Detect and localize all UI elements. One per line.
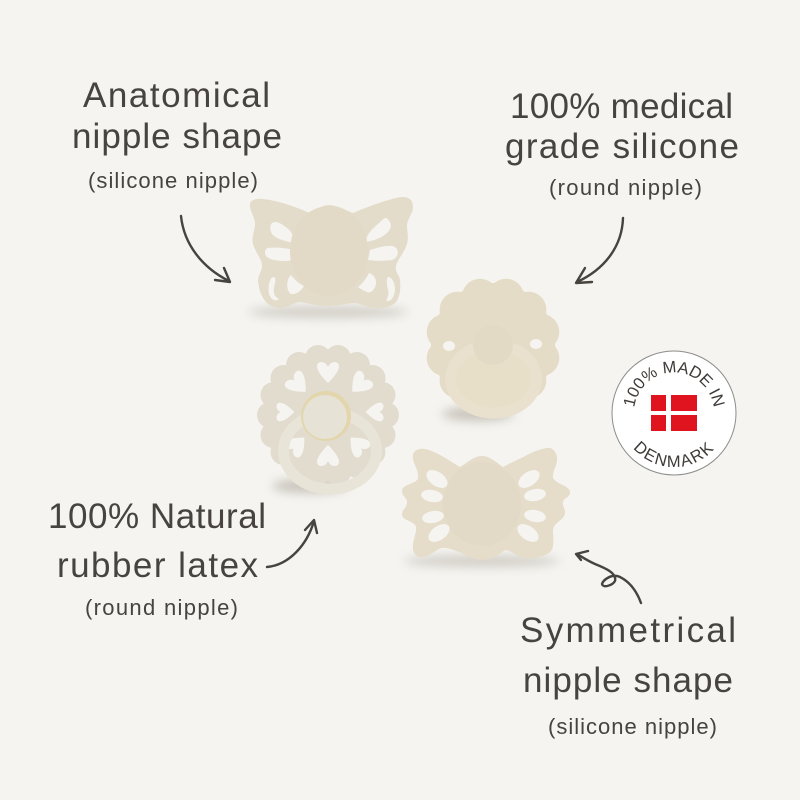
callout: medical grade silicone: grade silicone	[505, 127, 739, 166]
icon: Danish flag	[651, 395, 697, 431]
callout: anatomical nipple shape: (silicone nipple)	[88, 168, 258, 193]
callout: medical grade silicone	[505, 87, 739, 200]
badge text: top arc: 100% MADE IN	[624, 360, 725, 406]
callout: symmetrical nipple shape: nipple shape	[523, 661, 733, 700]
badge text: bottom arc: DENMARK	[634, 440, 714, 467]
badge: 100% made in Denmark	[612, 350, 736, 476]
callout: natural rubber latex: (round nipple)	[85, 595, 238, 620]
callout: anatomical nipple shape	[72, 76, 282, 193]
arrow: to symmetrical pacifier	[576, 551, 641, 603]
callout: symmetrical nipple shape: Symmetrical	[520, 611, 736, 650]
pacifier: daisy round nipple	[427, 279, 559, 421]
callout: anatomical nipple shape: nipple shape	[72, 117, 282, 156]
callout: natural rubber latex: 100% Natural	[48, 497, 266, 536]
callout: anatomical nipple shape: Anatomical	[83, 76, 270, 115]
pacifier: heart cutout round nipple	[257, 345, 399, 493]
callout: medical grade silicone: 100% medical	[510, 87, 733, 126]
arrow: to daisy pacifier	[576, 218, 623, 283]
pacifier: symmetrical candy shape	[402, 448, 570, 567]
callout: symmetrical nipple shape	[520, 611, 736, 739]
callout: symmetrical nipple shape: (silicone nipple)	[548, 714, 717, 739]
arrow: to heart pacifier	[267, 520, 317, 567]
callout: medical grade silicone: (round nipple)	[549, 175, 702, 200]
callout: natural rubber latex: rubber latex	[57, 546, 258, 585]
callout: natural rubber latex	[48, 497, 266, 620]
pacifier: butterfly anatomical	[248, 197, 413, 318]
arrow: to butterfly pacifier	[181, 216, 230, 282]
